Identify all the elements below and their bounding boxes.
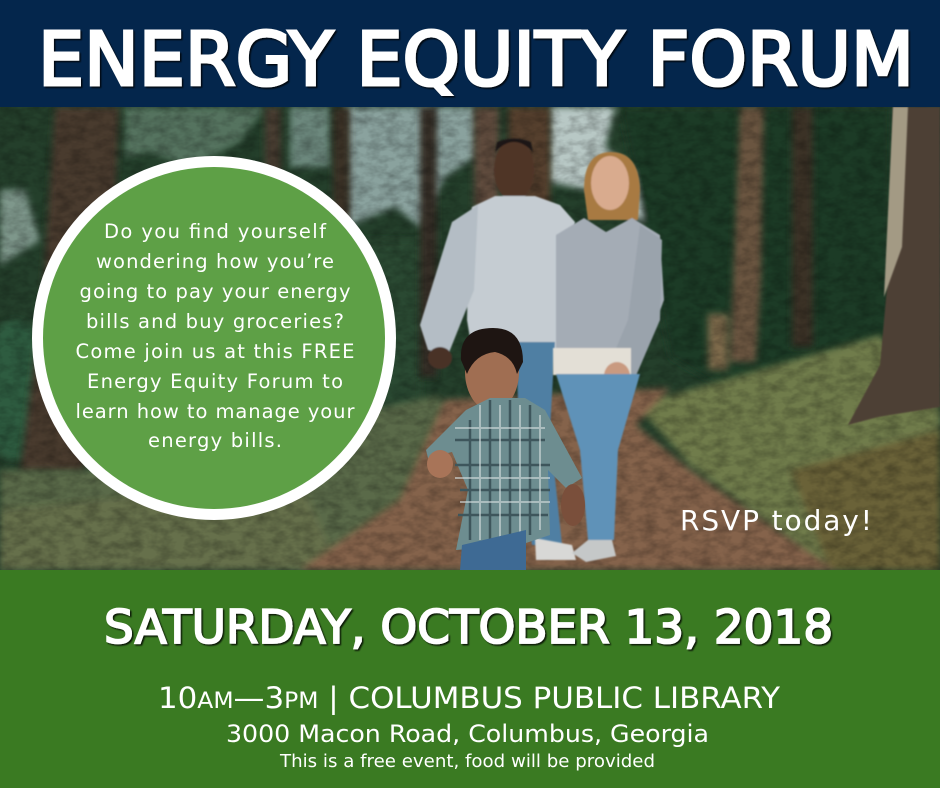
child: [426, 328, 585, 570]
title: ENERGY EQUITY FORUM: [38, 17, 914, 103]
callout text: Energy Equity Forum to: [87, 370, 343, 393]
callout text: learn how to manage your: [76, 400, 355, 423]
callout text: Do you find yourself: [104, 220, 327, 243]
event details panel: [0, 570, 940, 788]
address: 3000 Macon Road, Columbus, Georgia: [226, 720, 709, 748]
date: SATURDAY, OCTOBER 13, 2018: [104, 600, 833, 654]
tree trunk right: [848, 107, 940, 425]
rsvp text: RSVP today!: [680, 504, 872, 537]
time and venue: 10AM—3PM | COLUMBUS PUBLIC LIBRARY: [158, 681, 780, 715]
photo: family walking on a forest path: [0, 107, 940, 570]
man: [420, 138, 575, 545]
callout text: [76, 220, 355, 452]
callout text: bills and buy groceries?: [86, 310, 344, 333]
callout text: wondering how you’re: [96, 250, 334, 273]
woman: [535, 152, 664, 562]
callout circle: [32, 156, 396, 520]
callout text: Come join us at this FREE: [76, 340, 354, 363]
callout text: going to pay your energy: [80, 280, 350, 303]
callout text: energy bills.: [148, 429, 282, 452]
texture: foliage and grass grain: [0, 107, 940, 570]
title banner: [0, 0, 940, 107]
note: This is a free event, food will be provided: [279, 751, 655, 772]
